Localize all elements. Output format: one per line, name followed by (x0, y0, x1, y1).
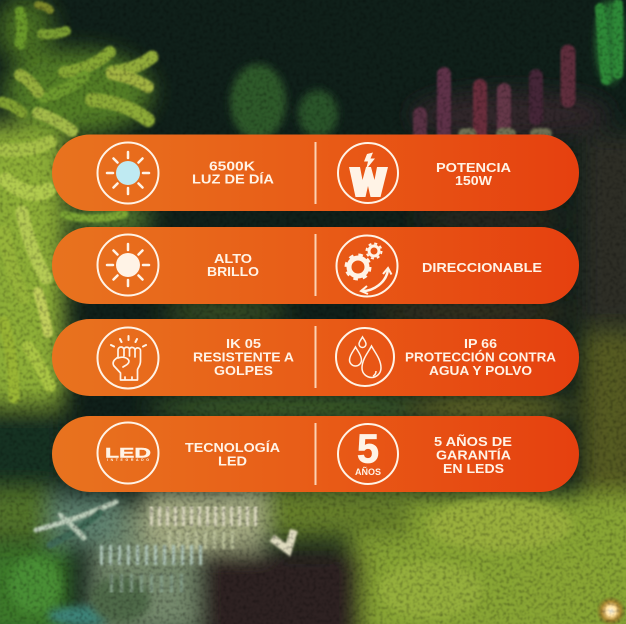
background: left tree fronds (2, 5, 152, 398)
text: 5 años de garantía en LEDs: GARANTÍA (436, 448, 512, 462)
divider (314, 326, 316, 388)
divider (314, 234, 316, 296)
text: IP 66 protección contra agua y polvo: IP 66 (464, 336, 497, 351)
text: tecnología LED (185, 440, 281, 468)
panel: row 4 pill (52, 416, 579, 492)
text: alto brillo (207, 251, 259, 279)
background: lens glare (596, 596, 626, 624)
panel: row 2 (52, 227, 579, 304)
text: 6500K luz de día: 6500K (209, 158, 256, 174)
text: tecnología LED: TECNOLOGÍA (185, 440, 281, 455)
text: potencia 150W: 150W (455, 173, 493, 188)
text: tecnología LED: LED (218, 454, 247, 468)
text: IP 66 protección contra agua y polvo: PROTECCIÓN CONTRA (405, 350, 557, 364)
background: hosta leaves (36, 502, 116, 545)
text: potencia 150W (436, 160, 512, 188)
icon: water drops (336, 328, 394, 386)
icon: 5 years warranty: 5 (357, 426, 379, 472)
panel: row 1 pill (52, 134, 579, 211)
text: 5 años de garantía en LEDs (434, 434, 512, 476)
icon: fist impact (98, 328, 158, 388)
icon: LED badge: LED (105, 444, 151, 460)
icon: gears and arrow (336, 236, 398, 296)
text: 5 años de garantía en LEDs: EN LEDS (443, 461, 504, 476)
background: white grass (100, 514, 294, 585)
icon: power W with bolt (338, 143, 398, 203)
panel: row 1 (52, 134, 579, 211)
panel: row 4 (52, 416, 579, 492)
divider (314, 423, 316, 485)
panel: row 3 (52, 319, 579, 396)
text: IP 66 protección contra agua y polvo (405, 336, 557, 378)
text: 6500K luz de día: LUZ DE DÍA (192, 172, 275, 186)
text: alto brillo: BRILLO (207, 264, 259, 279)
background: purple plumes (420, 4, 618, 134)
text: IK 05 resistente a golpes: IK 05 (226, 336, 261, 351)
icon: 5 years warranty: AÑOS (355, 467, 381, 478)
text: IK 05 resistente a golpes: RESISTENTE A (193, 350, 295, 364)
text: IK 05 resistente a golpes: GOLPES (214, 363, 273, 378)
icon: LED badge: INTEGRADO (107, 458, 149, 462)
text: IP 66 protección contra agua y polvo: AGUA Y POLVO (429, 363, 532, 378)
divider (314, 142, 316, 204)
panel: row 3 pill (52, 319, 579, 396)
text: 6500K luz de día (192, 158, 275, 186)
panel: row 2 pill (52, 227, 579, 304)
icon: bright sun (98, 234, 158, 296)
text: 5 años de garantía en LEDs: 5 AÑOS DE (434, 434, 512, 449)
icon: 5 years warranty (338, 424, 398, 484)
text: direccionable: DIRECCIONABLE (422, 260, 542, 275)
text: IK 05 resistente a golpes (193, 336, 295, 378)
text: potencia 150W: POTENCIA (436, 160, 512, 175)
icon: daylight sun (98, 142, 158, 204)
text: alto brillo: ALTO (214, 251, 252, 266)
icon: LED badge (98, 422, 158, 484)
